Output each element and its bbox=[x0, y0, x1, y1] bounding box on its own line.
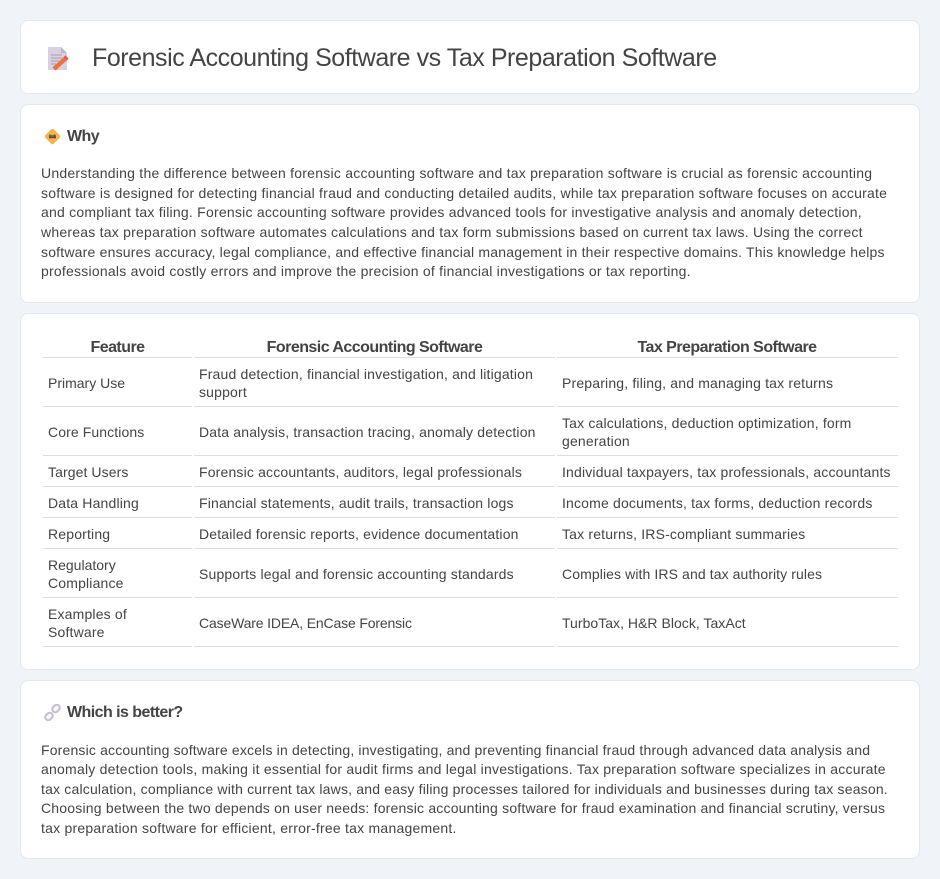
row: regulatory compliance bbox=[48, 557, 822, 591]
row: core functions bbox=[48, 415, 852, 449]
row: core functions: Data analysis, transaction tracing, anomaly detection bbox=[199, 424, 536, 440]
icon: document with pencil bbox=[48, 47, 68, 70]
row: primary use bbox=[48, 366, 833, 400]
row: data handling: Data Handling bbox=[48, 495, 139, 511]
text block: why: Understanding the difference between forensic accounting software and tax preparation software is crucial as forensic accounting bbox=[41, 165, 872, 181]
text block: which is better: anomaly detection tools, making it essential for audit firms and legal investigations. Tax preparation software specializes in accurate bbox=[41, 761, 886, 777]
icon: chain link bbox=[44, 704, 61, 721]
title: Forensic Accounting Software vs Tax Preparation Software bbox=[92, 44, 717, 72]
row: reporting: Reporting bbox=[48, 526, 110, 542]
row: primary use: Preparing, filing, and managing tax returns bbox=[562, 375, 833, 391]
text block: why: and compliant tax filing. Forensic accounting software provides advanced tools for investigative analysis and anomaly detection, bbox=[41, 204, 862, 220]
text block: which is better: tax calculation, compliance with current tax laws, and easy filing processes tailored for individuals and businesses during tax season. bbox=[41, 781, 888, 797]
row: target users bbox=[48, 464, 891, 480]
heading: which is better: Which is better? bbox=[67, 704, 183, 721]
row: data handling: Financial statements, audit trails, transaction logs bbox=[199, 495, 514, 511]
text block: why: software is designed for detecting financial fraud and conducting detailed audits, while tax preparation software focuses on accurate bbox=[41, 185, 887, 201]
row: target users: Individual taxpayers, tax professionals, accountants bbox=[562, 464, 891, 480]
text block: why bbox=[41, 165, 887, 279]
row: regulatory compliance: Complies with IRS and tax authority rules bbox=[562, 566, 822, 582]
row: examples of software bbox=[48, 606, 746, 640]
panel: comparison table bbox=[20, 313, 920, 670]
heading: why: Why bbox=[67, 128, 99, 145]
row: regulatory compliance: Regulatory bbox=[48, 557, 116, 573]
table header: Feature bbox=[90, 338, 145, 356]
row: core functions: Core Functions bbox=[48, 424, 144, 440]
panel: title header bbox=[20, 20, 920, 94]
row: reporting: Detailed forensic reports, evidence documentation bbox=[199, 526, 519, 542]
comparison table bbox=[43, 338, 898, 647]
text block: which is better: Forensic accounting software excels in detecting, investigating, and preventing financial fraud through advanced data analysis and bbox=[41, 742, 870, 758]
panel: why bbox=[20, 104, 920, 303]
row: core functions: generation bbox=[562, 433, 630, 449]
row: regulatory compliance: Supports legal and forensic accounting standards bbox=[199, 566, 514, 582]
row: examples of software: CaseWare IDEA, EnCase Forensic bbox=[199, 615, 412, 631]
row: examples of software: Examples of bbox=[48, 606, 127, 622]
row: target users: Forensic accountants, auditors, legal professionals bbox=[199, 464, 522, 480]
row: primary use: support bbox=[199, 384, 247, 400]
row: regulatory compliance: Compliance bbox=[48, 575, 124, 591]
row: reporting: Tax returns, IRS-compliant summaries bbox=[562, 526, 805, 542]
text block: which is better: Choosing between the two depends on user needs: forensic accounting software for fraud examination and financial scrutiny, versus bbox=[41, 800, 885, 816]
text block: why: software ensures accuracy, legal compliance, and effective financial management in their respective domains. This knowledge helps bbox=[41, 244, 885, 260]
table header: Tax Preparation Software bbox=[637, 338, 817, 356]
text block: why: whereas tax preparation software automates calculations and tax form submissions based on current tax laws. Using the correct bbox=[41, 224, 863, 240]
row: primary use: Fraud detection, financial investigation, and litigation bbox=[199, 366, 533, 382]
text block: which is better: tax preparation software for efficient, error-free tax management. bbox=[41, 820, 457, 836]
row: data handling bbox=[48, 495, 873, 511]
panel: which is better bbox=[20, 680, 920, 859]
row: core functions: Tax calculations, deduction optimization, form bbox=[562, 415, 852, 431]
row: examples of software: TurboTax, H&R Block, TaxAct bbox=[562, 615, 746, 631]
table header: Forensic Accounting Software bbox=[267, 338, 482, 356]
row: reporting bbox=[48, 526, 805, 542]
table header bbox=[90, 338, 817, 356]
row: examples of software: Software bbox=[48, 624, 105, 640]
row: data handling: Income documents, tax forms, deduction records bbox=[562, 495, 873, 511]
row: primary use: Primary Use bbox=[48, 375, 125, 391]
row: target users: Target Users bbox=[48, 464, 128, 480]
text block: why: professionals avoid costly errors and improve the precision of financial investigations or tax reporting. bbox=[41, 263, 691, 279]
icon: warning diamond bbox=[44, 128, 60, 144]
